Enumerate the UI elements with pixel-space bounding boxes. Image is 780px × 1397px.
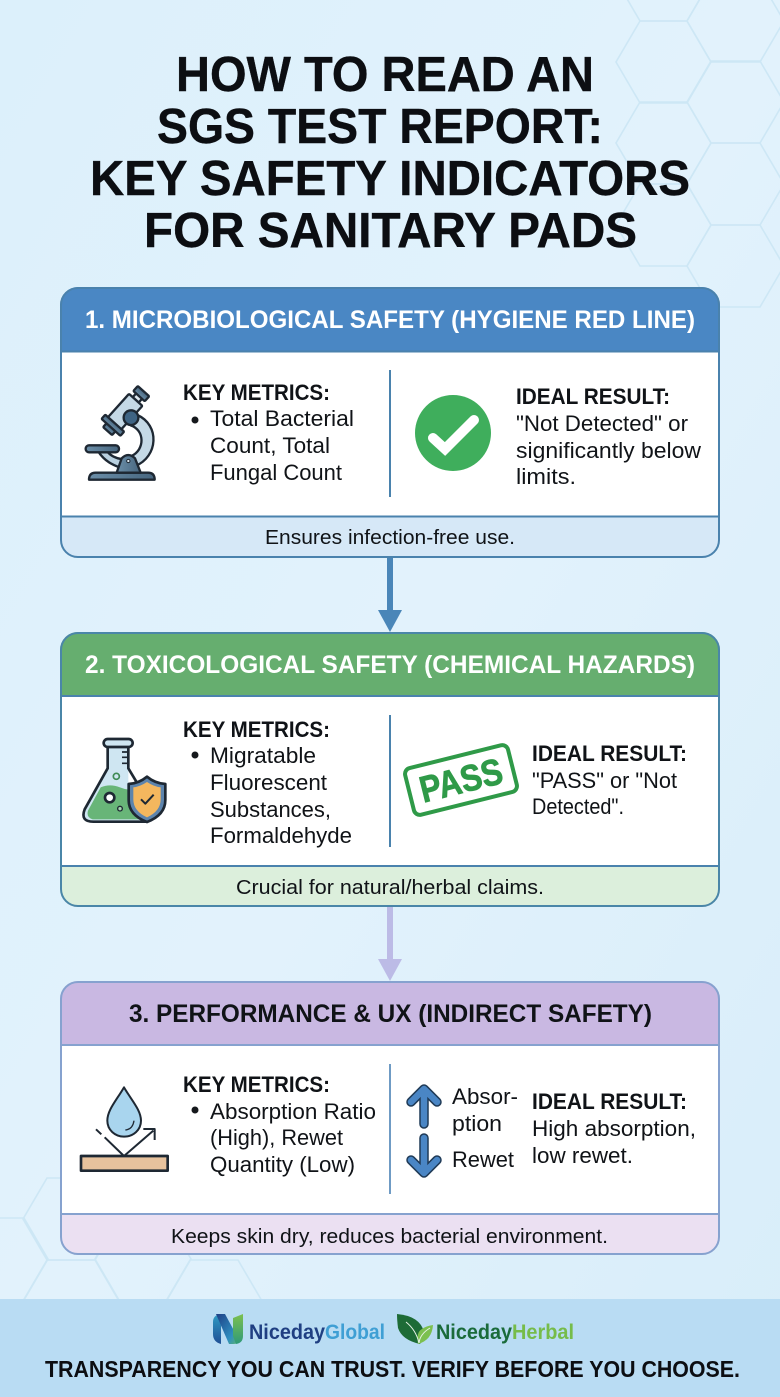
text: ideal result: "PASS" or "Not: [532, 768, 677, 793]
footer note: Keeps skin dry, reduces bacterial environment.: [171, 1226, 608, 1248]
text: key metrics: KEY METRICS:: [183, 717, 330, 742]
title: SGS TEST REPORT:: [157, 100, 603, 154]
text: key metrics: Migratable: [210, 743, 316, 768]
icon: microscope: [86, 383, 155, 480]
text: key metrics: Quantity (Low): [210, 1152, 355, 1177]
logo: NicedayHerbal: Niceday: [436, 1321, 512, 1344]
arrow: panel 2 to panel 3: [378, 907, 402, 981]
text: ideal result: significantly below: [516, 438, 701, 463]
footer note: Ensures infection-free use.: [265, 527, 515, 549]
logo: NicedayGlobal: [213, 1314, 385, 1344]
panel: toxicological safety: [60, 632, 720, 907]
title: KEY SAFETY INDICATORS: [90, 152, 690, 206]
text: ideal result: High absorption,: [532, 1116, 696, 1141]
logo: NicedayGlobal: Global: [325, 1321, 385, 1344]
text: key metrics: [183, 380, 354, 485]
text: key metrics: Count, Total: [210, 433, 330, 458]
title: FOR SANITARY PADS: [144, 204, 637, 258]
text: ideal result: IDEAL RESULT:: [516, 384, 670, 409]
text: key metrics: [183, 717, 352, 848]
logo: NicedayGlobal: Niceday: [249, 1321, 325, 1344]
text: ideal result: [532, 1089, 696, 1168]
text: ideal result: IDEAL RESULT:: [532, 1089, 687, 1114]
tagline: TRANSPARENCY YOU CAN TRUST. VERIFY BEFORE YOU CHOOSE.: [45, 1356, 740, 1382]
text: ideal result: [516, 384, 701, 489]
text: key metrics: Total Bacterial: [210, 406, 354, 431]
text: ideal result: limits.: [516, 464, 576, 489]
heading: performance and UX: 3. PERFORMANCE & UX (INDIRECT SAFETY): [129, 1000, 652, 1028]
title: [90, 48, 690, 258]
text: key metrics: Substances,: [210, 797, 331, 822]
logo: NicedayHerbal: [397, 1314, 574, 1344]
icon: pass stamp: PASS: [415, 750, 507, 811]
footer band: [0, 1299, 780, 1397]
text: key metrics: Fungal Count: [210, 460, 342, 485]
icon: water drop on surface: [81, 1087, 168, 1171]
text: ideal result: low rewet.: [532, 1143, 633, 1168]
text: arrow labels: Absor-: [452, 1084, 518, 1109]
title: HOW TO READ AN: [176, 48, 594, 102]
text: key metrics: KEY METRICS:: [183, 380, 330, 405]
text: key metrics: Absorption Ratio: [210, 1099, 376, 1124]
text: arrow labels: [452, 1084, 518, 1172]
logo: NicedayHerbal: Herbal: [512, 1321, 574, 1344]
text: ideal result: Detected".: [532, 794, 624, 819]
icon: green check: [415, 395, 491, 471]
text: arrow labels: ption: [452, 1111, 502, 1136]
text: key metrics: Formaldehyde: [210, 823, 352, 848]
icon: up and down arrows: [411, 1089, 437, 1173]
text: ideal result: IDEAL RESULT:: [532, 741, 687, 766]
text: ideal result: "Not Detected" or: [516, 411, 688, 436]
icon: flask with shield: [83, 739, 165, 822]
footer note: Crucial for natural/herbal claims.: [236, 877, 544, 899]
text: key metrics: [183, 1072, 376, 1177]
text: key metrics: (High), Rewet: [210, 1125, 343, 1150]
heading: toxicological safety: 2. TOXICOLOGICAL SAFETY (CHEMICAL HAZARDS): [85, 651, 695, 679]
text: key metrics: KEY METRICS:: [183, 1072, 330, 1097]
text: ideal result: [532, 741, 687, 819]
text: arrow labels: Rewet: [452, 1147, 514, 1172]
panel: performance and UX: [60, 981, 720, 1255]
panel: microbiological safety: [60, 287, 720, 558]
text: key metrics: Fluorescent: [210, 770, 327, 795]
heading: microbiological safety: 1. MICROBIOLOGICAL SAFETY (HYGIENE RED LINE): [85, 306, 695, 334]
arrow: panel 1 to panel 2: [378, 558, 402, 632]
